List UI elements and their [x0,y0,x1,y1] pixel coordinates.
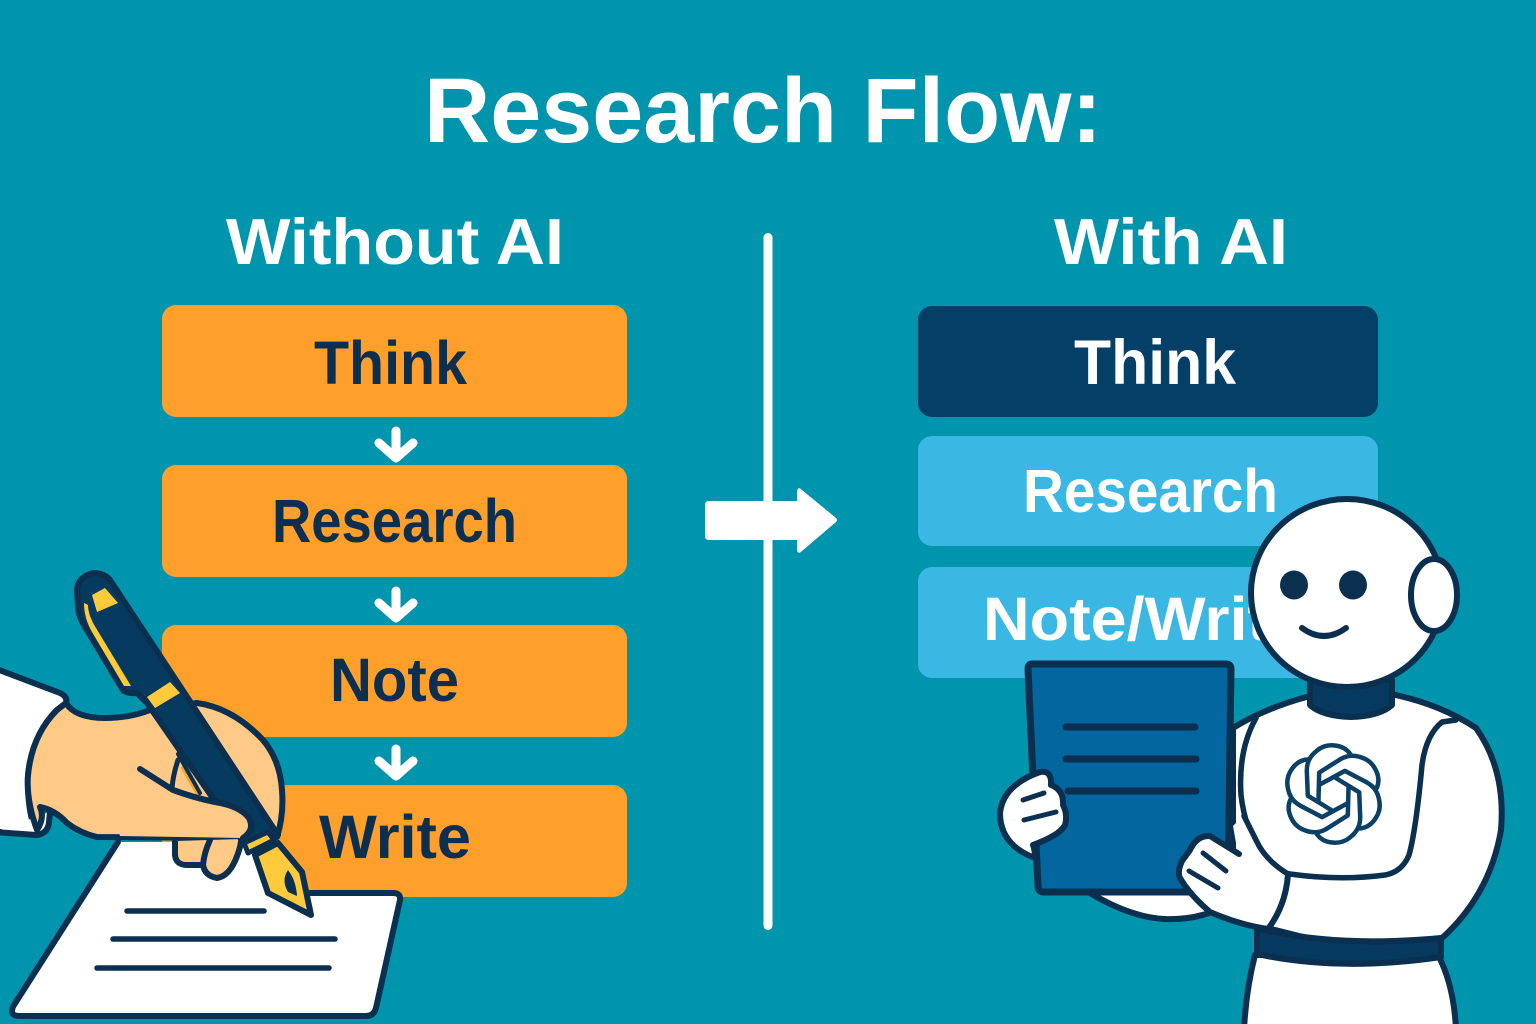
step: think: Think [1074,328,1237,398]
logo [1278,745,1389,843]
step: write [162,785,627,897]
step: think [918,306,1378,417]
arrow: research to note [379,591,413,618]
panel: without AI steps [162,305,627,897]
step: think: Think [314,329,467,397]
nib [244,832,311,915]
step: research: Research [1023,457,1278,525]
fingers below the pen [175,836,242,878]
document lines [1066,727,1196,791]
step: write: Write [319,803,471,871]
pen body [77,573,278,846]
smile [1302,628,1346,636]
far arm [1090,728,1240,919]
arrow: without AI to with AI [705,488,837,553]
sleeve [0,668,66,832]
robot lower body [1244,955,1456,1024]
arrow: note to write [379,749,413,776]
hand [28,703,282,838]
neck [1310,680,1392,717]
ear [1411,559,1457,631]
right hand [1179,815,1288,929]
step: research: Research [272,487,517,555]
document [1028,664,1231,892]
step: think [162,305,627,417]
heading: with AI: With AI [1054,205,1288,278]
step: note [162,625,627,737]
title: Research Flow: [424,60,1102,162]
head [1251,499,1443,687]
panel: with AI steps [918,306,1378,678]
cuff bottom [0,812,50,835]
step: note: Note [330,646,459,714]
step: note/write: Note/Write [983,585,1305,653]
thumb web [140,754,205,800]
arrow: think to research [379,431,413,458]
index finger [110,769,251,838]
heading: without AI: Without AI [226,205,564,278]
step: research [162,465,627,577]
paper [12,842,400,1016]
step: note/write [918,567,1378,678]
divider and transition arrow [705,233,837,930]
left hand [1000,772,1066,858]
illustration: hand writing with pen [0,573,400,1016]
waist band [1257,928,1441,964]
torso [1233,694,1502,945]
illustration: robot holding document [1000,499,1502,1024]
step: research [918,436,1378,546]
pen details [84,588,180,708]
eyes [1280,570,1367,600]
chest panel [1241,718,1456,878]
